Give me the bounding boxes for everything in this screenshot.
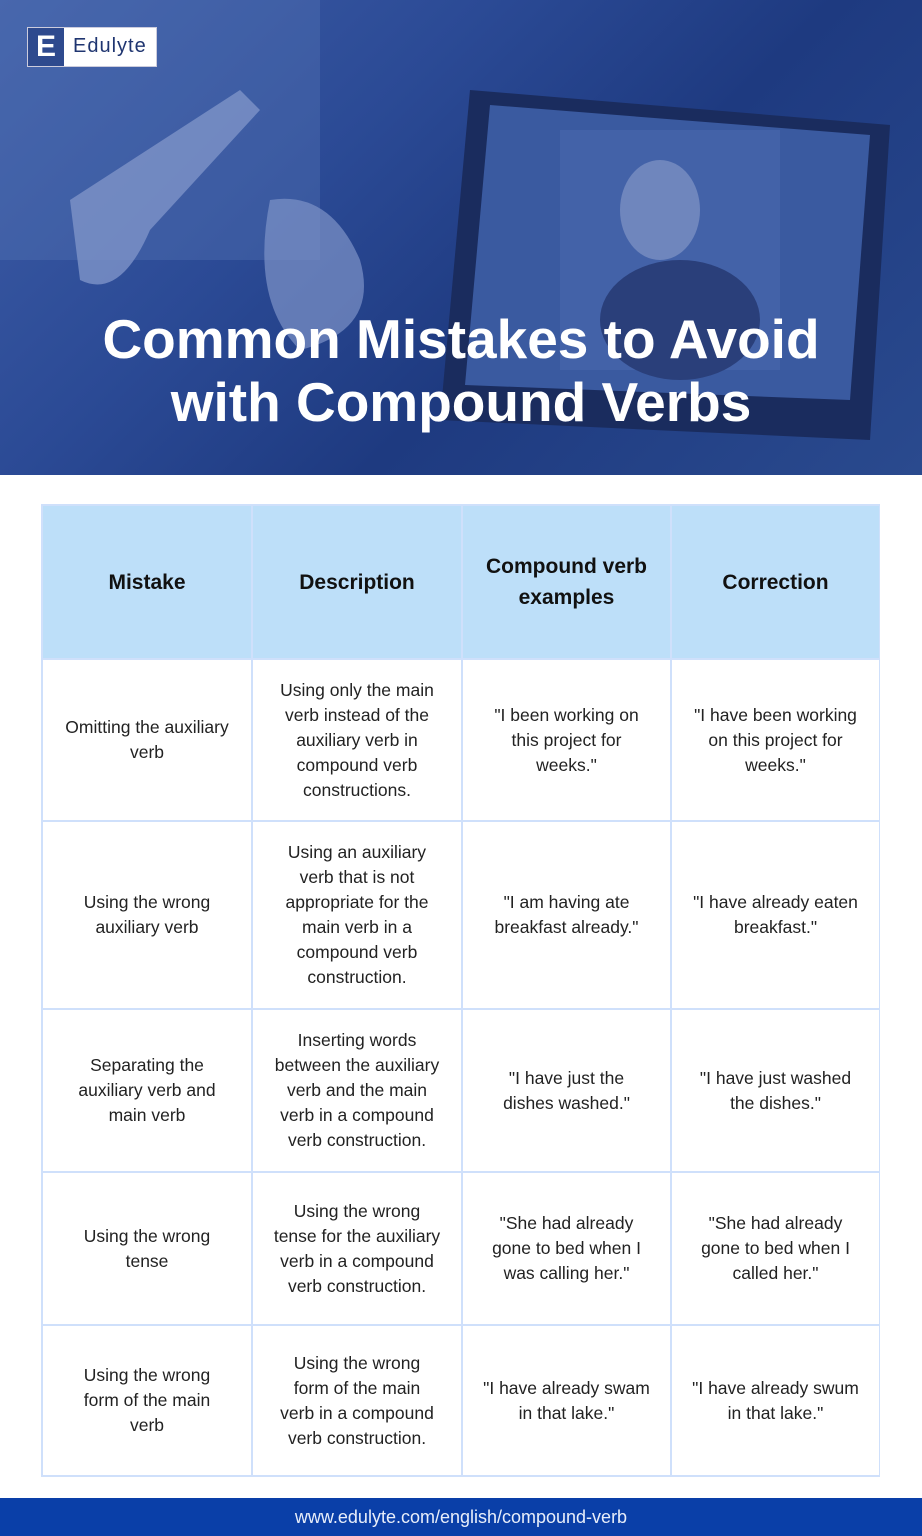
table: Using the wrong <box>84 1226 210 1246</box>
table: "I have already swum <box>692 1378 859 1398</box>
table: examples <box>519 586 614 609</box>
table: gone to bed when I <box>701 1238 850 1258</box>
table: Correction <box>722 570 829 594</box>
table: Separating the <box>90 1055 204 1075</box>
table: dishes washed." <box>503 1092 630 1112</box>
table: verb in a compound <box>280 1402 434 1422</box>
logo: Edulyte <box>73 35 147 57</box>
table: gone to bed when I <box>492 1238 641 1258</box>
table: auxiliary verb in <box>296 730 418 750</box>
logo <box>27 27 157 67</box>
table: auxiliary verb and <box>78 1080 216 1100</box>
table: was calling her." <box>504 1263 629 1283</box>
logo: E <box>36 30 56 63</box>
table: verb <box>130 742 164 762</box>
table: Using the wrong <box>84 892 210 912</box>
table: verb that is not <box>300 867 414 887</box>
table: "I have just the <box>509 1068 624 1088</box>
title: with Compound Verbs <box>171 371 751 433</box>
table: Compound verb <box>486 555 647 578</box>
table: verb in a compound <box>280 1250 434 1270</box>
table: verb instead of the <box>285 704 429 724</box>
table: main verb in a <box>302 917 412 937</box>
table: compound verb <box>297 942 417 962</box>
table: in that lake." <box>728 1402 823 1422</box>
footer <box>0 1498 922 1536</box>
table: Using the wrong <box>84 1365 210 1385</box>
table: weeks." <box>745 754 806 774</box>
table: verb <box>130 1415 164 1435</box>
title <box>102 308 820 433</box>
table: Omitting the auxiliary <box>65 717 229 737</box>
table: Mistake <box>108 570 186 594</box>
table: appropriate for the <box>285 892 428 912</box>
table: construction. <box>307 967 407 987</box>
footer: www.edulyte.com/english/compound-verb <box>295 1507 627 1527</box>
table: on this project for <box>708 730 843 750</box>
table: constructions. <box>303 780 411 800</box>
table: "I have been working <box>694 704 857 724</box>
table: Using only the main <box>280 680 434 700</box>
table: "I have already eaten <box>693 892 858 912</box>
table: between the auxiliary <box>275 1055 439 1075</box>
table: weeks." <box>536 754 597 774</box>
table: Using the wrong <box>294 1352 420 1372</box>
table: form of the main <box>84 1390 210 1410</box>
table: Description <box>299 570 415 594</box>
laptop <box>440 90 890 440</box>
table: "She had already <box>709 1213 842 1233</box>
table: verb construction. <box>288 1130 426 1150</box>
table: Inserting words <box>298 1030 416 1050</box>
table: Using the wrong <box>294 1200 420 1220</box>
table: verb construction. <box>288 1428 426 1448</box>
table: "I have already swam <box>483 1378 650 1398</box>
table: main verb <box>109 1105 185 1125</box>
table: verb construction. <box>288 1276 426 1296</box>
table: auxiliary verb <box>95 917 199 937</box>
title: Common Mistakes to Avoid <box>102 308 820 370</box>
table: compound verb <box>297 754 417 774</box>
table: tense for the auxiliary <box>274 1226 440 1246</box>
table <box>41 504 880 1477</box>
table: tense <box>126 1250 168 1270</box>
table: verb and the main <box>287 1080 427 1100</box>
hands <box>70 90 364 350</box>
table: in that lake." <box>519 1402 614 1422</box>
table: form of the main <box>294 1378 420 1398</box>
table: verb in a compound <box>280 1105 434 1125</box>
table: "I am having ate <box>504 892 629 912</box>
table: Using an auxiliary <box>288 842 426 862</box>
table: "I have just washed <box>700 1068 851 1088</box>
hero banner <box>0 0 922 475</box>
table: "I been working on <box>494 704 639 724</box>
table: "She had already <box>500 1213 633 1233</box>
table: the dishes." <box>730 1092 821 1112</box>
table: this project for <box>512 730 621 750</box>
table: called her." <box>732 1263 818 1283</box>
table: breakfast." <box>734 917 817 937</box>
table: breakfast already." <box>494 917 639 937</box>
